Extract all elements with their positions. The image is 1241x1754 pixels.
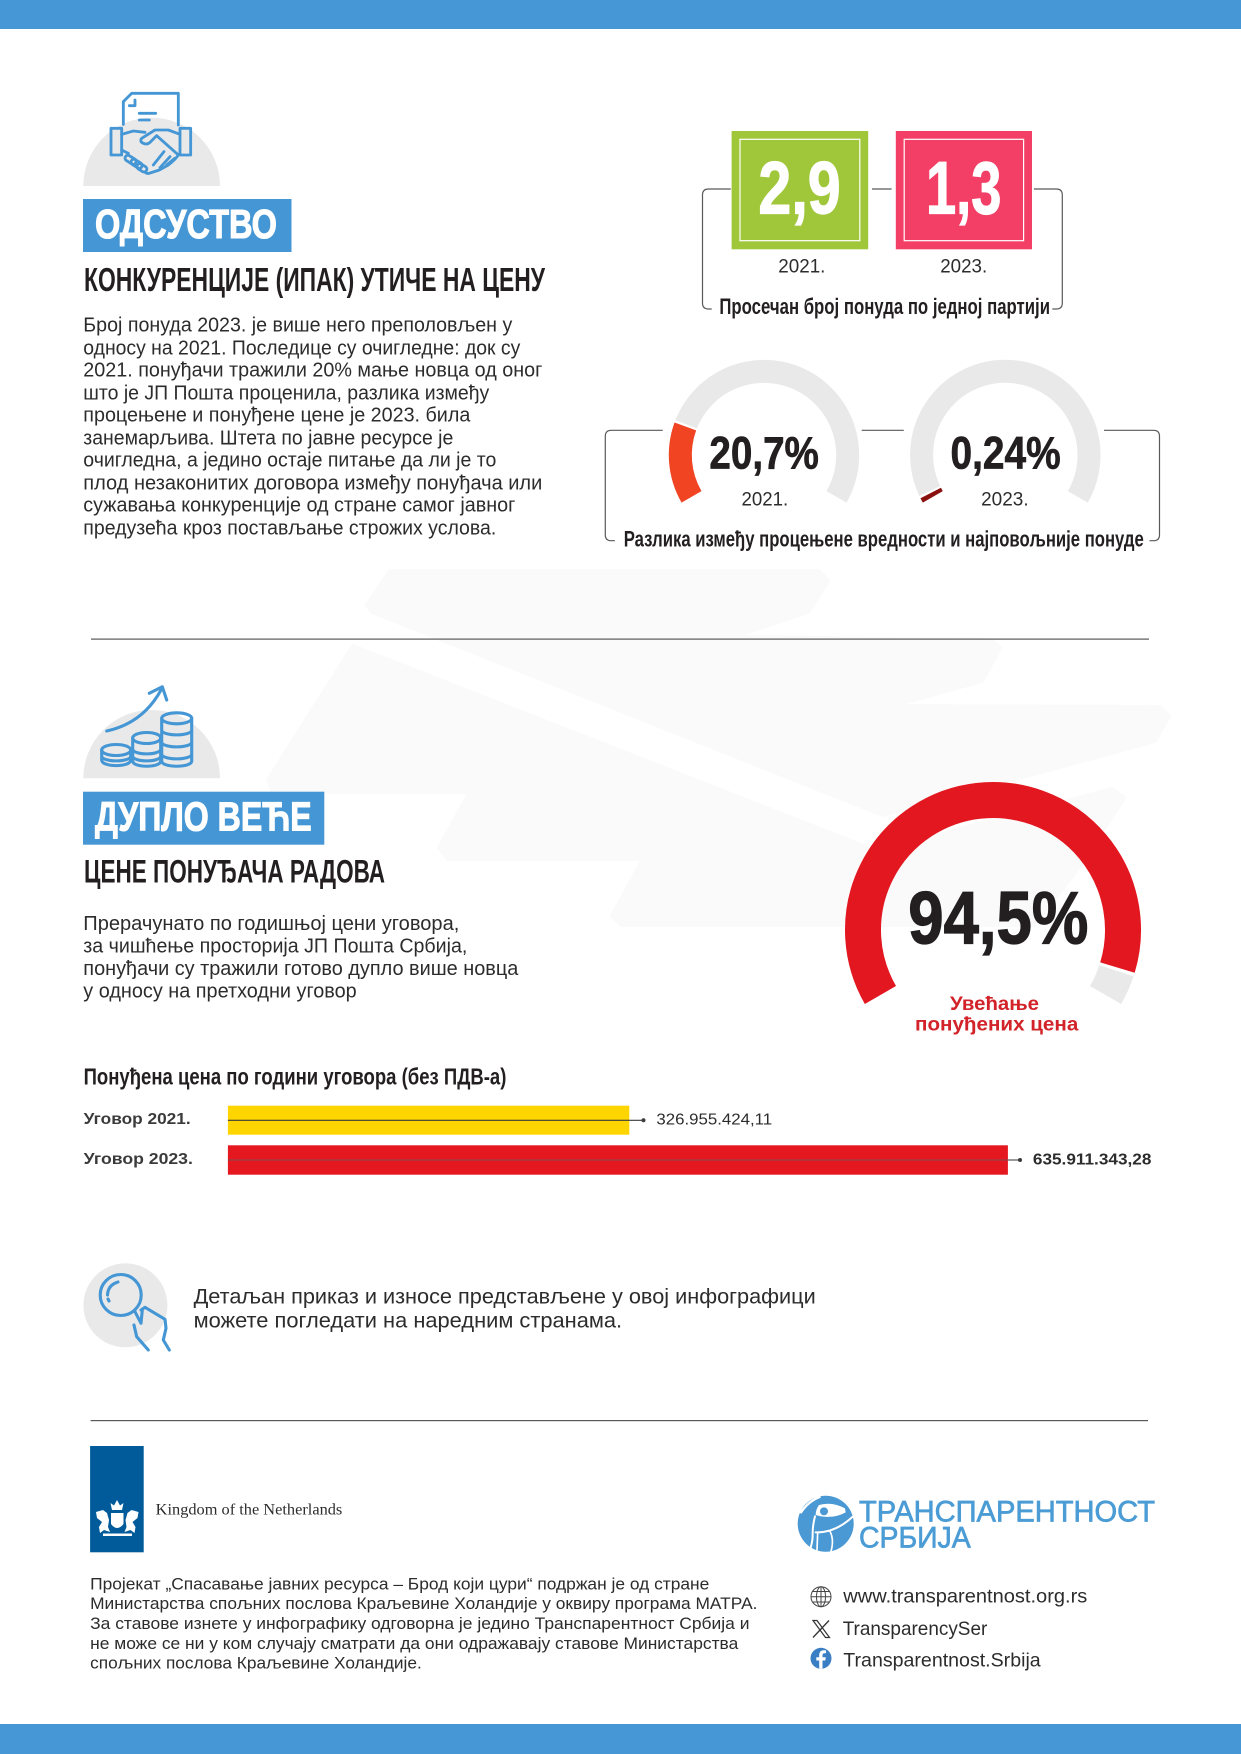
logo: Kingdom of the Netherlands: Kingdom of the Netherlands — [156, 1501, 342, 1518]
bar: contract 2023: 635.911.343,28 — [1033, 1151, 1152, 1168]
text block: section 1 body: што је ЈП Пошта проценила, разлика између — [83, 382, 489, 404]
logo: Kingdom of the Netherlands — [90, 1446, 342, 1552]
icon: magnifier in hand — [83, 1263, 169, 1350]
text block: section 1 body: сужавања конкуренције од стране самог јавног — [83, 495, 515, 517]
heading label: ДУПЛО ВЕЋЕ: ДУПЛО ВЕЋЕ — [95, 794, 312, 840]
gauge: 0.24%: 0,24% — [950, 427, 1061, 478]
icon: coat of arms — [96, 1500, 138, 1536]
text block: section 1 body: очигледна, а једино остаје питање да ли је то — [83, 450, 496, 472]
gauge: 94.5%: 94,5% — [908, 876, 1088, 959]
bar: contract 2023 — [84, 1145, 1152, 1175]
label: price increase: Увећање — [950, 993, 1039, 1015]
icon: handshake and contract — [83, 93, 220, 186]
text block: section 1 body: процењене и понуђене цене је 2023. била — [83, 405, 471, 427]
text block: section 1 body: занемарљива. Штета по јавне ресурсе је — [83, 427, 453, 449]
logo: Transparency Serbia: ТРАНСПАРЕНТНОСТ — [859, 1496, 1155, 1529]
text block: disclaimer: Пројекат „Спасавање јавних ресурса – Брод који цури“ подржан је од стране — [90, 1575, 709, 1593]
text block: section 2 body — [83, 913, 519, 1002]
contact: X: TransparencySer — [843, 1618, 988, 1640]
logo: Transparency Serbia: СРБИЈА — [859, 1521, 971, 1554]
bar: contract 2023: Уговор 2023. — [84, 1151, 193, 1168]
icon: coins and rising arrow — [83, 687, 220, 778]
note: detailed view: Детаљан приказ и износе представљене у овој инфографици — [194, 1285, 816, 1308]
panel: difference gauges — [605, 371, 1160, 552]
text block: disclaimer: За ставове изнете у инфографику одговорна је једино Транспарентност Србија и — [90, 1615, 750, 1633]
icon: TI globe — [798, 1496, 854, 1552]
bar: contract 2021: Уговор 2021. — [84, 1111, 191, 1128]
subheading: конкуренције: КОНКУРЕНЦИЈЕ (ИПАК) УТИЧЕ НА ЦЕНУ — [84, 261, 545, 298]
bottom bar — [0, 1724, 1241, 1754]
text block: section 1 body: односу на 2021. Последице су очигледне: док су — [83, 337, 520, 359]
icon: Facebook — [810, 1648, 832, 1669]
stat box: 2023: 2023. — [940, 257, 987, 278]
note: detailed view: можете погледати на наредним странама. — [194, 1310, 622, 1333]
text block: disclaimer: Министарства спољних послова Краљевине Холандије у оквиру програма МАТРА. — [90, 1595, 758, 1613]
note: detailed view — [194, 1285, 816, 1333]
contact: Facebook: Transparentnost.Srbija — [843, 1650, 1041, 1672]
text block: section 1 body — [83, 315, 542, 539]
heading label: ОДСУСТВО: ОДСУСТВО — [95, 201, 277, 247]
text block: section 1 body: 2021. понуђачи тражили 20% мање новца од оног — [83, 360, 542, 382]
stat box: 2021: 2021. — [778, 257, 825, 278]
text block: section 2 body: Прерачунато по годишњој цени уговора, — [83, 913, 459, 935]
text block: disclaimer: не може се ни у ком случају сматрати да они одражавају ставове Министарства — [90, 1635, 739, 1653]
logo: Transparency Serbia — [798, 1496, 1155, 1554]
bar: contract 2021 — [84, 1106, 772, 1135]
text block: disclaimer — [90, 1575, 758, 1673]
icon: globe — [811, 1587, 831, 1607]
stat box: 2021 — [732, 131, 868, 278]
panel: average number of bids — [702, 131, 1062, 319]
gauge: 20.7% — [680, 371, 848, 511]
icon: X — [813, 1620, 830, 1638]
gauge: 0.24% — [922, 371, 1089, 511]
watermark: plane background — [268, 571, 1169, 925]
chart heading: Понуђена цена по години уговора (без ПДВ-а) — [84, 1063, 506, 1089]
stat box: 2023: 1,3 — [926, 146, 1001, 229]
caption: average bids: Просечан број понуда по једној партији — [719, 294, 1050, 319]
text block: disclaimer: спољних послова Краљевине Холандије. — [90, 1655, 422, 1673]
bar chart: offered price — [84, 1063, 1152, 1175]
subheading: цене понуђача: ЦЕНЕ ПОНУЂАЧА РАДОВА — [84, 854, 385, 890]
text block: section 2 body: у односу на претходни уговор — [83, 980, 357, 1002]
contact: website: www.transparentnost.org.rs — [842, 1586, 1088, 1608]
label: price increase — [915, 993, 1078, 1036]
label: price increase: понуђених цена — [915, 1014, 1078, 1036]
stat box: 2021: 2,9 — [758, 146, 841, 229]
text block: section 2 body: за чишћење просторија ЈП Пошта Србија, — [83, 935, 467, 957]
top bar — [0, 0, 1241, 29]
gauge: 94.5% — [863, 800, 1123, 1036]
text block: section 1 body: предузећа кроз постављање строжих услова. — [83, 517, 496, 539]
text block: section 1 body: плод незаконитих договора између понуђача или — [83, 472, 542, 494]
text block: section 1 body: Број понуда 2023. је више него преполовљен у — [83, 315, 512, 337]
gauge: 20.7%: 20,7% — [709, 427, 819, 478]
gauge: 0.24%: 2023. — [981, 490, 1029, 511]
stat box: 2023 — [896, 131, 1032, 278]
bar: contract 2021: 326.955.424,11 — [656, 1112, 772, 1128]
text block: section 2 body: понуђачи су тражили готово дупло више новца — [83, 958, 519, 980]
gauge: 20.7%: 2021. — [742, 490, 788, 511]
